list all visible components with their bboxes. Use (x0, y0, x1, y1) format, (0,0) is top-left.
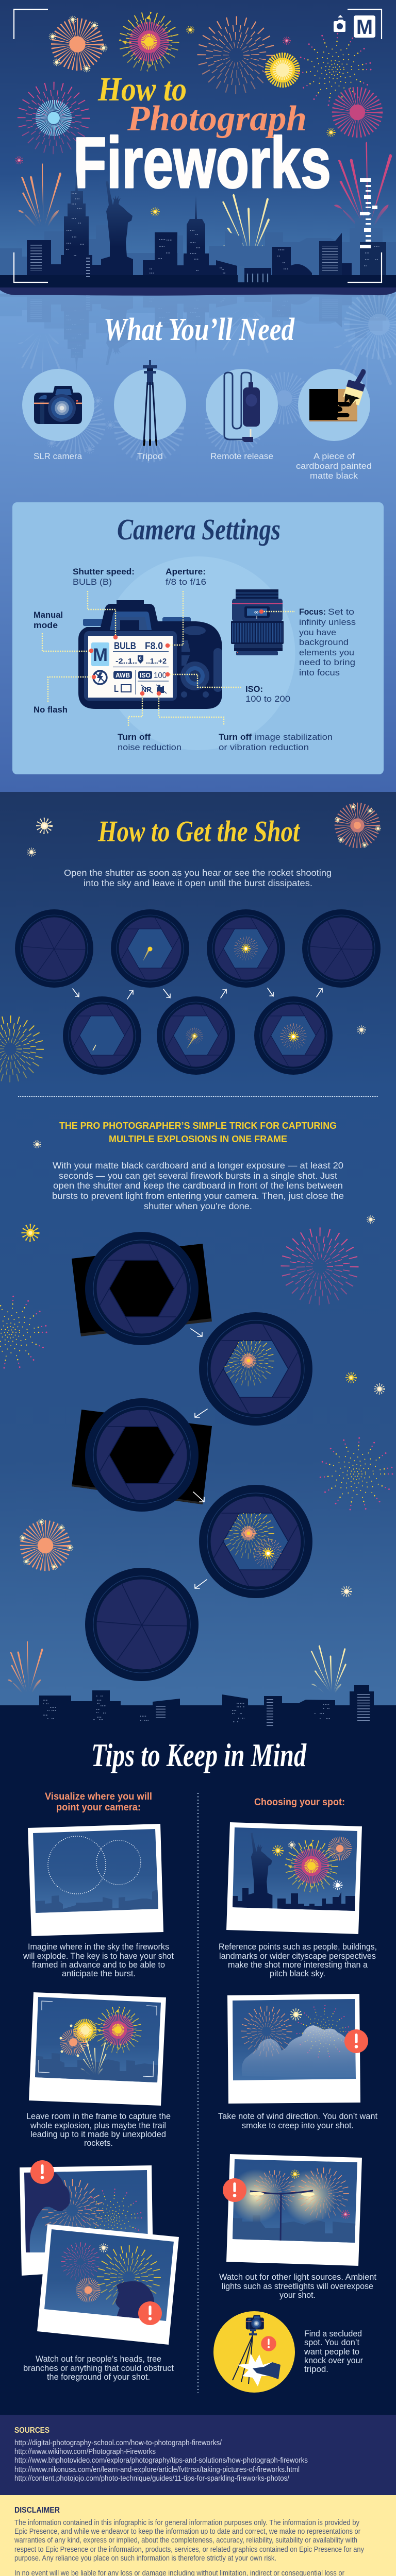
tip text: knock over your (304, 2356, 363, 2365)
tip text: rockets. (84, 2139, 113, 2148)
camera screen readout: L (114, 684, 119, 694)
rockets near skyline (8, 1641, 346, 1698)
firework: magenta spokes (341, 96, 374, 129)
source links: http://www.wikihow.com/Photograph-Fireworks (14, 2448, 156, 2456)
source links: http://content.photojojo.com/photo-technique/guides/11-tips-for-sparkling-fireworks-photos/ (14, 2475, 290, 2483)
camera screen readout: -2..1.. (116, 657, 137, 666)
capitol and ground (0, 266, 396, 289)
tip text (219, 1942, 377, 1978)
heading: How to Get the Shot (97, 815, 301, 848)
setting labels: elements you (299, 648, 354, 657)
shutter open with two bursts (199, 1485, 312, 1598)
setting labels: background (299, 638, 349, 647)
intro text: into the sky and leave it open until the burst dissipates. (84, 878, 312, 888)
tip text: whole explosion, plus maybe the trail (30, 2121, 166, 2130)
decorative fireworks (0, 805, 380, 1079)
setting labels: Turn off (118, 733, 151, 742)
disclaimer text: warranties of any kind, express or implied, about the completeness, accuracy, reliability, suitability or availability with (14, 2536, 357, 2545)
setting labels: BULB (B) (73, 578, 112, 587)
small stars (16, 27, 334, 215)
tip text: smoke to creep into your shot. (242, 2121, 354, 2130)
lens illustration (231, 589, 284, 655)
tip text: pitch black sky. (270, 1969, 325, 1978)
icon: black cardboard and paintbrush (309, 366, 370, 421)
setting labels: No flash (34, 705, 68, 715)
setting labels (34, 567, 356, 752)
setting labels: mode (34, 621, 58, 630)
item labels: Tripod (137, 451, 163, 461)
setting labels: image stabilization (255, 733, 333, 742)
tip text: make the shot more interesting than a (228, 1960, 368, 1970)
tip text (23, 2354, 174, 2382)
tip text: Find a secluded (304, 2329, 362, 2338)
setting labels: infinity unless (299, 618, 356, 627)
camera screen readout: 0 (139, 656, 142, 661)
city skyline (0, 171, 396, 282)
item labels (34, 451, 372, 481)
title (73, 71, 331, 203)
camera screen readout: ..1..+2 (146, 657, 167, 666)
sequence arrows (191, 1329, 207, 1588)
trick paragraph: shutter when you’re done. (144, 1201, 252, 1211)
shutter open with first burst (199, 1312, 312, 1426)
background: hero sky (0, 0, 396, 289)
focus scale marks (360, 178, 377, 248)
column subheads: Choosing your spot: (254, 1797, 345, 1808)
tip text: Watch out for other light sources. Ambient (219, 2273, 376, 2282)
item labels: SLR camera (34, 451, 82, 461)
trick paragraph: seconds — you can get several firework bursts in a single shot. Just (59, 1171, 337, 1181)
polaroid: head in foreground (37, 2224, 179, 2345)
tip text: spot. You don’t (304, 2338, 359, 2347)
camera screen readout: AWB (116, 672, 130, 679)
item labels: matte black (310, 471, 358, 481)
heading: Tips to Keep in Mind (91, 1737, 307, 1773)
firework: pink and yellow burst (123, 15, 175, 68)
setting labels: need to bring (299, 658, 355, 667)
item labels: A piece of (314, 451, 355, 461)
polaroid: leave room in the frame (29, 1992, 166, 2106)
panel: camera settings (12, 502, 384, 774)
disclaimer text (14, 2519, 367, 2576)
setting labels: Focus: (299, 607, 326, 617)
tip text: leading up to it made by unexploded (30, 2130, 166, 2139)
wavy dark band (0, 287, 396, 296)
decorative fireworks right and left (0, 1142, 392, 1595)
setting labels: or vibration reduction (219, 743, 309, 752)
source links: http://www.nikonusa.com/en/learn-and-explore/article/fvttrrsx/taking-pictures-of-fireworks.html (14, 2466, 300, 2474)
reflected skyline (0, 292, 396, 394)
panel: hero (0, 9, 396, 289)
subheading (59, 1121, 337, 1144)
disclaimer text: purpose. Any reliance you place on such information is therefore strictly at your own risk. (14, 2554, 276, 2563)
trick paragraph (52, 1160, 344, 1211)
source links (14, 2439, 308, 2483)
item labels: Remote release (210, 451, 273, 461)
setting labels: you have (299, 628, 336, 637)
tip text: the foreground of your shot. (47, 2372, 150, 2382)
setting labels: f/8 to f/16 (166, 578, 206, 587)
tip text: want people to (304, 2347, 359, 2357)
tip text (218, 2112, 377, 2130)
item labels: cardboard painted (296, 461, 372, 471)
vertical dotted divider (197, 1793, 199, 2393)
tip text: framed in advance and to be able to (32, 1960, 165, 1970)
disclaimer text: The information contained in this infographic is for general information purposes only. The information is provided by (14, 2519, 360, 2527)
tip text (23, 1942, 174, 1978)
title: How to (97, 71, 187, 108)
setting labels: ISO: (245, 685, 263, 694)
viewfinder frame corners (14, 9, 382, 282)
icon: remote release (224, 372, 260, 442)
trick paragraph: open the shutter and keep the cardboard in front of the lens between (53, 1180, 343, 1191)
background: tips section (0, 1705, 396, 2415)
camera screen readout: M (93, 645, 108, 665)
subheading: THE PRO PHOTOGRAPHER’S SIMPLE TRICK FOR CAPTURING (59, 1121, 337, 1131)
title: Photograph (127, 99, 307, 139)
disclaimer text: Epic Presence, and while we endeavor to keep the information up to date and correct, we make no representations or (14, 2528, 360, 2536)
panel: tips to keep in mind (20, 1737, 377, 2393)
setting labels: 100 to 200 (245, 694, 290, 704)
lens illustration: ∞ (254, 608, 259, 616)
tip text (304, 2329, 363, 2374)
logo: camera and M (334, 15, 375, 39)
tip text: will explode. The key is to have your shot (23, 1952, 174, 1961)
lower skyline (0, 1685, 396, 1726)
callout dots (89, 609, 263, 696)
column subheads: Visualize where you will (45, 1791, 152, 1802)
subheading: MULTIPLE EXPLOSIONS IN ONE FRAME (109, 1134, 287, 1144)
camera screen readout: 100 (154, 671, 167, 680)
firework: yellow sun burst (268, 56, 297, 84)
item circles (22, 369, 370, 441)
column subheads: point your camera: (56, 1802, 141, 1813)
faint background fireworks (48, 302, 396, 452)
firework: dotted burst (299, 33, 371, 106)
firework: pink and blue burst (22, 86, 86, 150)
trick paragraph: With your matte black cardboard and a longer exposure — at least 20 (53, 1160, 343, 1171)
tip text: lights such as streetlights will overexpose (222, 2282, 373, 2291)
tip text: tripod. (304, 2365, 328, 2374)
tip text: Reference points such as people, buildings, (219, 1942, 377, 1952)
background: how to get the shot section (0, 792, 396, 1719)
polaroid: streetlights (223, 2154, 362, 2266)
fireworks cluster top-left (50, 17, 106, 71)
logo: camera and M: M (356, 16, 373, 39)
firework: large salmon burst (202, 21, 271, 90)
tip text: Imagine where in the sky the fireworks (28, 1942, 169, 1952)
setting labels: into focus (299, 668, 340, 677)
heading: Camera Settings (117, 513, 280, 546)
setting labels: Turn off (219, 733, 252, 742)
trick paragraph: bursts to prevent light from entering your camera. Then, just close the (52, 1191, 344, 1201)
source links: http://digital-photography-school.com/how-to-photograph-fireworks/ (14, 2439, 222, 2447)
tip text (219, 2273, 376, 2300)
disclaimer heading: DISCLAIMER (14, 2506, 60, 2515)
setting labels: Aperture: (166, 567, 206, 577)
panel: how to get the shot (0, 805, 396, 1726)
heading: What You’ll Need (104, 312, 295, 347)
tip text (26, 2112, 171, 2148)
shutter sequence (15, 909, 381, 1075)
tip text: Leave room in the frame to capture the (26, 2112, 171, 2121)
icon: tripod (143, 360, 157, 446)
setting labels: Set to (328, 607, 354, 617)
tip text: Watch out for people’s heads, tree (36, 2354, 161, 2364)
panel: sources (0, 2415, 396, 2495)
icon: SLR camera (34, 386, 82, 424)
panel: disclaimer (0, 2495, 396, 2576)
tip text: Take note of wind direction. You don’t want (218, 2112, 377, 2121)
polaroid: statue of liberty and fireworks (226, 1822, 362, 1934)
intro text: Open the shutter as soon as you hear or see the rocket shooting (64, 868, 332, 878)
intro text (64, 868, 332, 888)
shutter with cardboard covering again (72, 1398, 212, 1512)
polaroid: visualize dotted circles (28, 1824, 163, 1936)
camera screen readout: NR (141, 685, 152, 693)
rising rockets (18, 142, 392, 265)
shutter closed (85, 1568, 199, 1681)
panel: what you'll need (0, 287, 396, 481)
camera back illustration (78, 600, 222, 709)
setting labels: Shutter speed: (73, 567, 135, 577)
background: what you'll need section (0, 287, 396, 792)
dotted divider (18, 1096, 378, 1097)
polaroid: wind and smoke (227, 1994, 368, 2104)
camera screen readout: ISO (140, 672, 151, 679)
camera screen readout (91, 641, 169, 694)
camera screen readout: F8.0 (145, 641, 163, 652)
sources heading: SOURCES (14, 2426, 50, 2435)
tip text: landmarks or wider cityscape perspectives (219, 1952, 376, 1961)
setting labels: Manual (34, 611, 63, 620)
source links: http://www.bhphotovideo.com/explora/photography/tips-and-solutions/how-photograph-fireworks (14, 2456, 308, 2465)
tip text: your shot. (279, 2291, 316, 2300)
tip text: branches or anything that could obstruct (23, 2364, 174, 2373)
shutter with cardboard covering (72, 1232, 212, 1345)
setting labels: noise reduction (118, 743, 182, 752)
camera screen readout: BULB (114, 641, 136, 652)
icon: tripod being kicked (213, 2311, 295, 2393)
shutter arrows (73, 988, 322, 999)
tip text: anticipate the burst. (62, 1969, 136, 1978)
callout connector lines (42, 591, 295, 727)
column subheads (45, 1791, 345, 1813)
polaroid: tree branches in the way (20, 2160, 153, 2276)
